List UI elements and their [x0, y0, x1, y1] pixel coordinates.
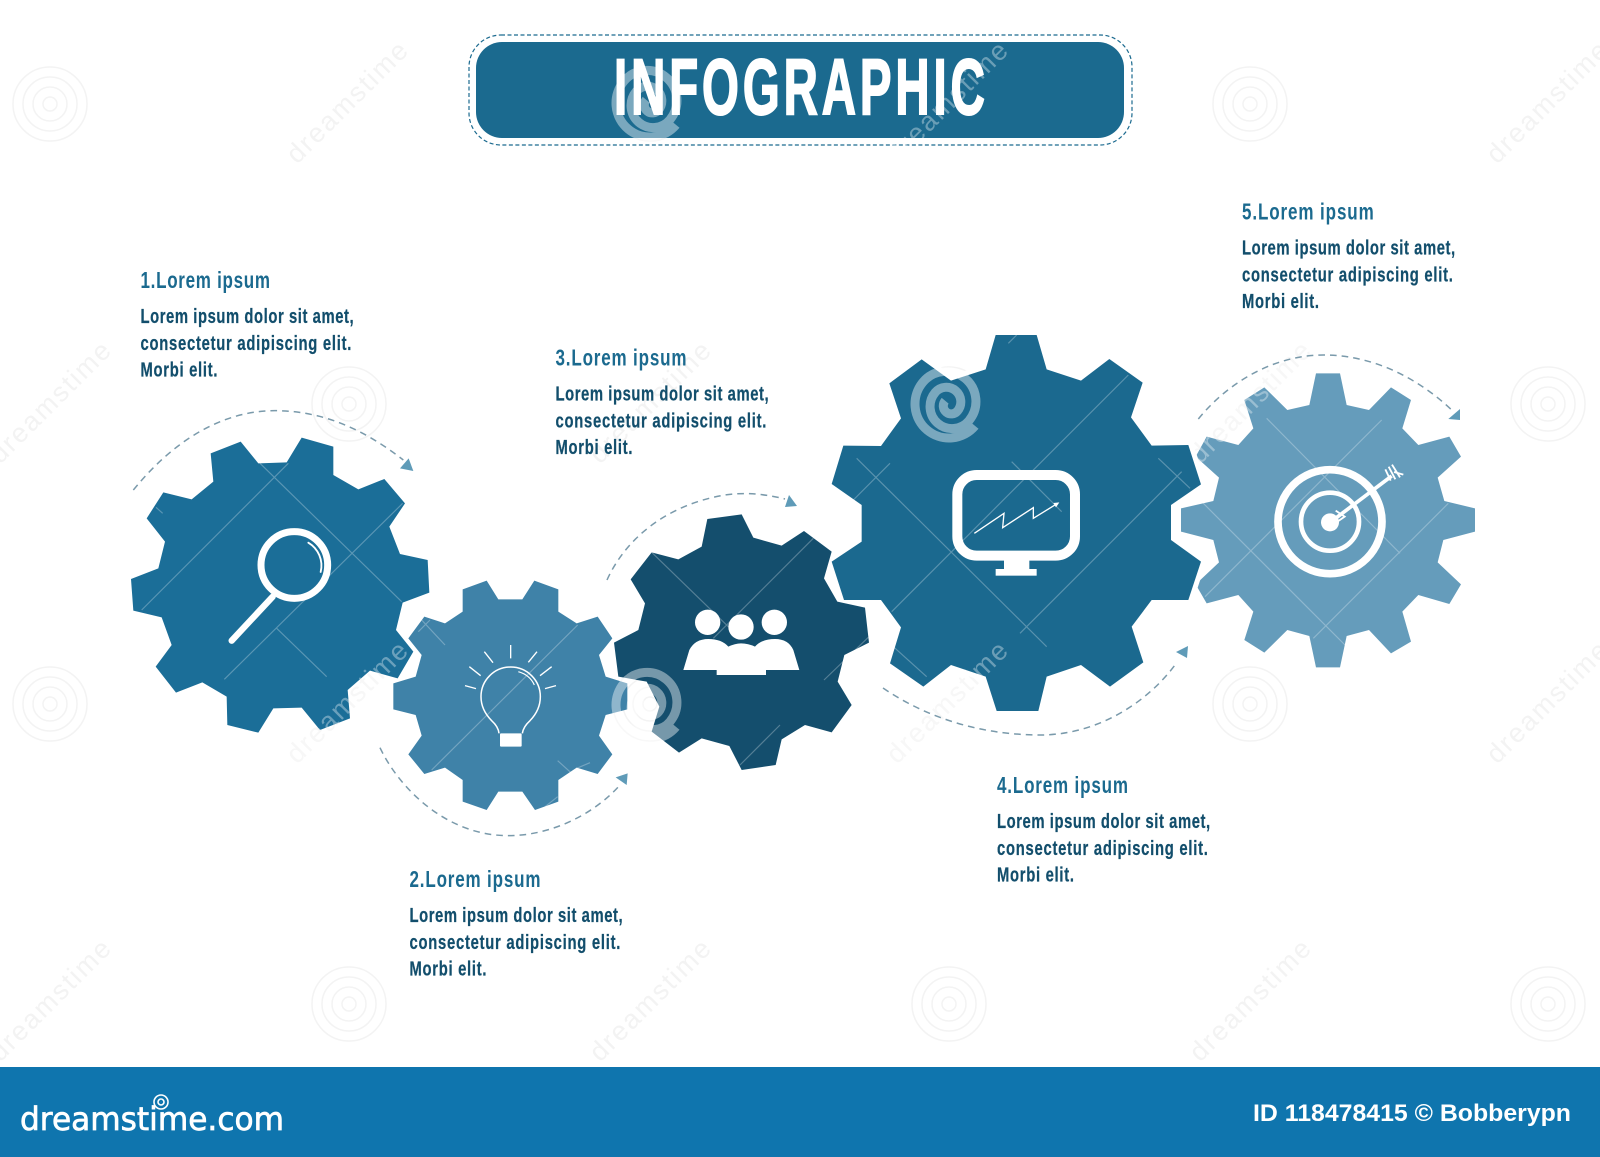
title banner — [469, 34, 1132, 169]
text block 3: Lorem ipsum dolor sit amet, — [556, 382, 769, 405]
text block 1: 1.Lorem ipsum — [140, 269, 270, 294]
text block 2 — [410, 868, 623, 980]
icon: target and arrow — [1278, 465, 1403, 574]
text block 5: Lorem ipsum dolor sit amet, — [1242, 236, 1455, 259]
gear 4: monitor — [832, 335, 1201, 711]
logo spiral — [154, 1095, 168, 1109]
text block 1: Morbi elit. — [140, 358, 217, 381]
watermark text: dreamstime — [1183, 932, 1318, 1067]
footer bar — [0, 1067, 1600, 1157]
text block 4: Lorem ipsum dolor sit amet, — [997, 810, 1210, 833]
text block 2: 2.Lorem ipsum — [410, 868, 540, 893]
text block 5: Morbi elit. — [1242, 290, 1319, 313]
footer logo: dreamstime.com — [20, 1100, 284, 1138]
arrow 4 — [883, 646, 1188, 735]
image credit: ID 118478415 © Bobberypn — [1253, 1100, 1571, 1127]
text block 4: Morbi elit. — [997, 863, 1074, 886]
text block 2: Lorem ipsum dolor sit amet, — [410, 904, 623, 927]
title: INFOGRAPHIC — [614, 42, 985, 131]
text block 3: Morbi elit. — [556, 436, 632, 459]
text block 1: Lorem ipsum dolor sit amet, — [140, 305, 354, 328]
arrow 5 — [1198, 355, 1460, 420]
text block 2: consectetur adipiscing elit. — [410, 931, 620, 954]
watermark overlays on gears — [280, 334, 1318, 769]
watermark text: dreamstime — [280, 634, 415, 769]
title banner: dreamstime — [880, 34, 1015, 169]
text block 4: 4.Lorem ipsum — [997, 774, 1128, 799]
arrow 3 — [607, 494, 797, 580]
text block 3: 3.Lorem ipsum — [556, 346, 686, 371]
icon: magnifying glass — [232, 532, 328, 641]
watermark text: dreamstime — [280, 34, 415, 169]
banner fill — [476, 42, 1124, 138]
banner dashed outline — [469, 35, 1132, 145]
icon: monitor with rising chart — [957, 475, 1075, 576]
gear 1: magnifier — [131, 438, 429, 733]
watermark text: dreamstime — [880, 634, 1015, 769]
text block 2: Morbi elit. — [410, 957, 486, 980]
text block 1: consectetur adipiscing elit. — [140, 332, 351, 355]
gear 5: target — [1181, 373, 1475, 667]
gear 3: people — [614, 514, 869, 770]
watermark overlays on gears: dreamstime — [1183, 334, 1318, 469]
arrow 2 — [380, 748, 628, 836]
text block 3 — [556, 346, 769, 459]
watermark text: dreamstime — [1183, 334, 1318, 469]
arrow 1 — [133, 411, 413, 490]
text block 5: consectetur adipiscing elit. — [1242, 263, 1453, 286]
text block 3: consectetur adipiscing elit. — [556, 409, 766, 432]
icon: three people — [683, 610, 799, 675]
text block 5 — [1242, 200, 1455, 313]
text block 4 — [997, 774, 1210, 886]
watermark overlays on gears: dreamstime — [880, 634, 1015, 769]
text block 5: 5.Lorem ipsum — [1242, 200, 1374, 225]
icon: light bulb — [465, 645, 556, 747]
text block 4: consectetur adipiscing elit. — [997, 837, 1208, 860]
watermark text: dreamstime — [583, 334, 718, 469]
text block 1 — [140, 269, 354, 381]
watermark overlays on gears: dreamstime — [280, 634, 415, 769]
watermark text: dreamstime — [583, 932, 718, 1067]
gear 2: light bulb — [393, 581, 627, 810]
